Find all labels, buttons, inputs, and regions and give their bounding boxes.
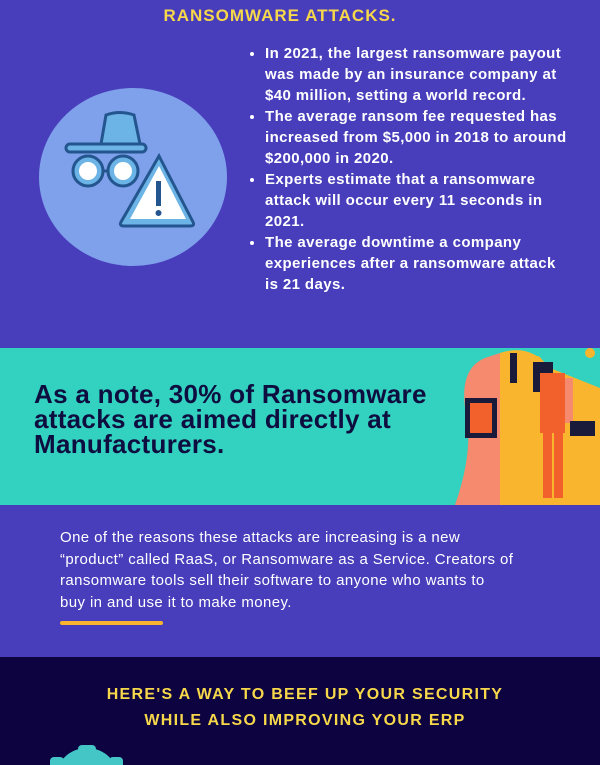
bullet list: was made by an insurance company at — [265, 66, 557, 83]
icon: gear — [50, 745, 123, 765]
bullet list: experiences after a ransomware attack — [265, 255, 556, 272]
icon: spy with warning — [39, 88, 227, 266]
text block: RaaS: “product” called RaaS, or Ransomware as a Service. Creators of — [60, 551, 513, 568]
bullet list: The average downtime a company — [265, 234, 521, 251]
panel: security — [0, 657, 600, 765]
heading — [34, 379, 427, 459]
bullet list — [250, 45, 567, 293]
heading: WHILE ALSO IMPROVING YOUR ERP — [144, 712, 466, 729]
title: RANSOMWARE ATTACKS. — [163, 6, 397, 25]
heading: HERE'S A WAY TO BEEF UP YOUR SECURITY — [107, 686, 503, 703]
heading: attacks are aimed directly at — [34, 404, 391, 434]
heading: As a note, 30% of Ransomware — [34, 379, 427, 409]
bullet list: The average ransom fee requested has — [265, 108, 557, 125]
bullet list: attack will occur every 11 seconds in — [265, 192, 542, 209]
section: stats — [0, 0, 600, 348]
text block: RaaS — [60, 529, 513, 611]
bullet list: increased from $5,000 in 2018 to around — [265, 129, 567, 146]
heading: Manufacturers. — [34, 429, 225, 459]
text block: RaaS: ransomware tools sell their software to anyone who wants to — [60, 572, 485, 589]
text block: RaaS: buy in and use it to make money. — [60, 594, 292, 611]
bullet list: In 2021, the largest ransomware payout — [265, 45, 561, 62]
panel: manufacturers note — [0, 348, 600, 505]
bullet list: $200,000 in 2020. — [265, 150, 394, 167]
text block: RaaS: One of the reasons these attacks are increasing is a new — [60, 529, 460, 546]
bullet list: Experts estimate that a ransomware — [265, 171, 535, 188]
bullet list: is 21 days. — [265, 276, 345, 293]
bullet list: $40 million, setting a world record. — [265, 87, 526, 104]
illustration: electrician — [455, 348, 600, 505]
bullet list: 2021. — [265, 213, 305, 230]
heading — [107, 686, 503, 729]
accent line — [60, 621, 163, 625]
